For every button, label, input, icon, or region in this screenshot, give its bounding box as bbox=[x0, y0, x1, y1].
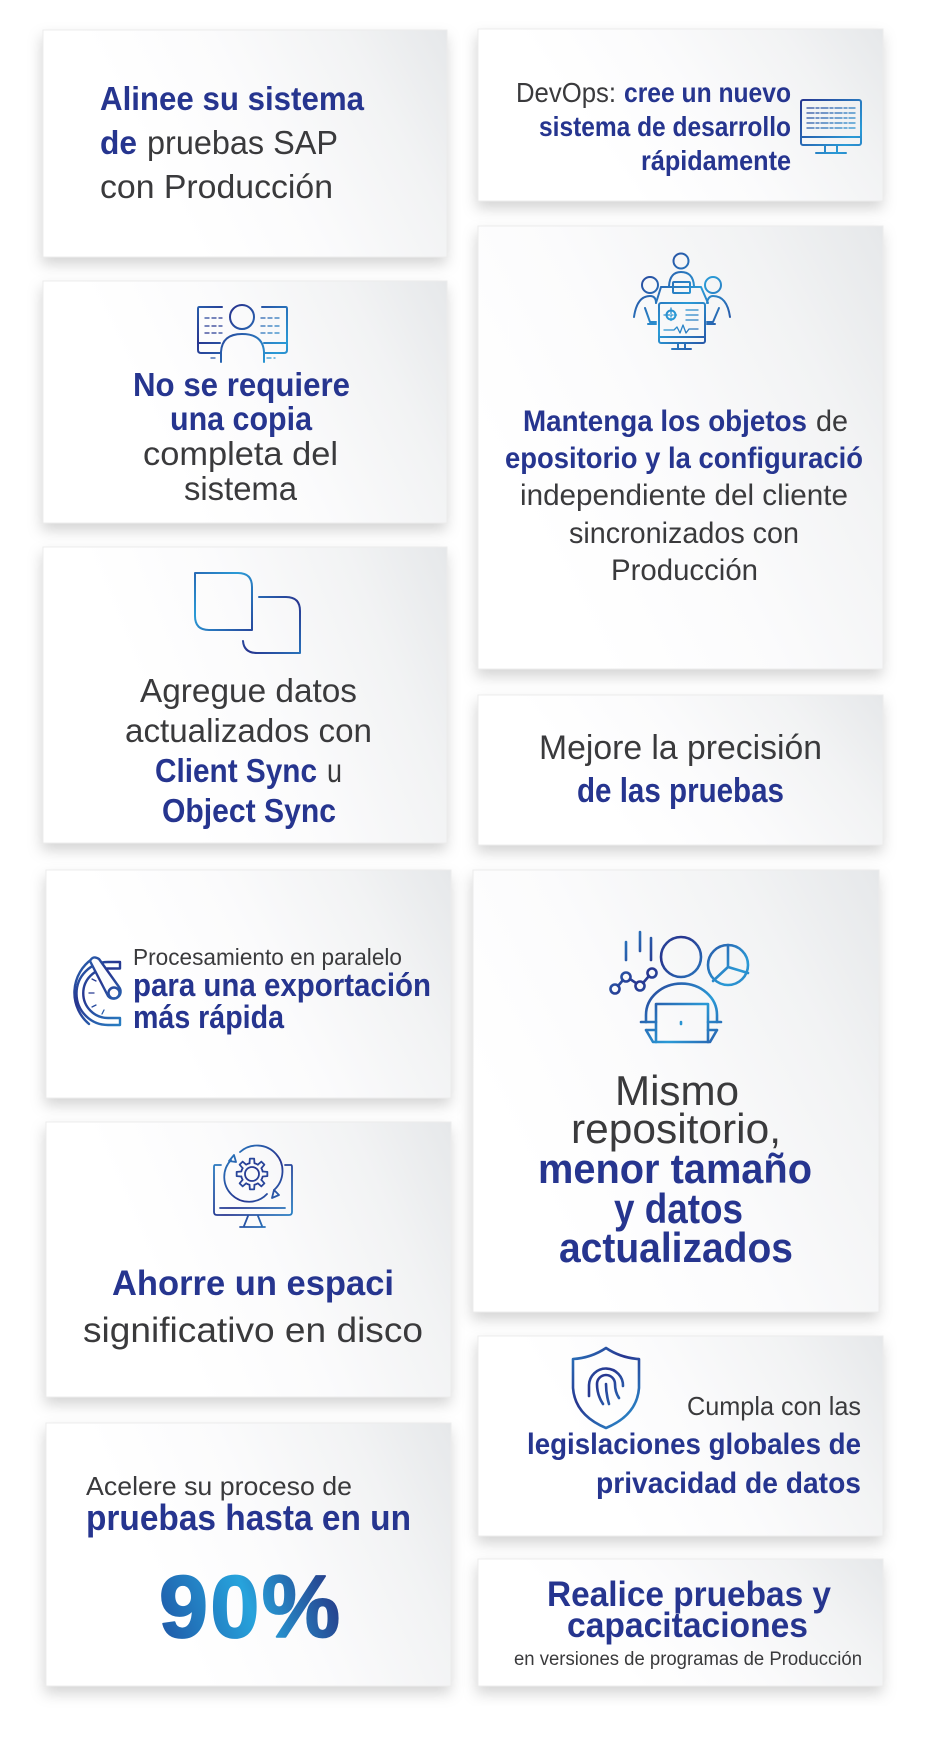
heading: privacy compliance: Cumpla con las bbox=[687, 1391, 861, 1421]
panel: accelerate testing 90% bbox=[46, 1423, 451, 1686]
heading: align test system: pruebas SAP bbox=[147, 124, 338, 161]
heading: no full copy required: una copia bbox=[170, 400, 313, 437]
heading: client sync: Object Sync bbox=[162, 792, 336, 829]
icon: team around monitor bbox=[634, 254, 730, 349]
panel: parallel processing bbox=[46, 870, 451, 1098]
heading: keep repository objects in sync: independiente del cliente bbox=[520, 479, 848, 512]
panel: save disk space bbox=[46, 1122, 451, 1397]
heading: same repository: y datos bbox=[614, 1185, 743, 1232]
heading: same repository: repositorio, bbox=[571, 1105, 781, 1152]
heading: same repository: actualizados bbox=[559, 1224, 793, 1271]
panel: client sync bbox=[43, 547, 447, 843]
icon: person before screens bbox=[198, 305, 287, 362]
heading: keep repository objects in sync: Producción bbox=[611, 554, 758, 587]
heading: no full copy required: No se requiere bbox=[133, 366, 350, 403]
heading: testing and training: Realice pruebas y bbox=[547, 1575, 832, 1614]
heading: save disk space bbox=[83, 1264, 423, 1350]
big number: 90%: 90% bbox=[159, 1557, 340, 1656]
heading: accelerate testing: Acelere su proceso de bbox=[86, 1471, 352, 1501]
heading: parallel processing: Procesamiento en paralelo bbox=[133, 944, 402, 970]
panel: devops bbox=[478, 29, 883, 201]
heading: keep repository objects in sync: Mantenga los objetos bbox=[523, 405, 807, 438]
heading: client sync: Agregue datos bbox=[140, 672, 357, 709]
heading: same repository: menor tamaño bbox=[538, 1145, 812, 1192]
heading: testing and training: en versiones de programas de Producción bbox=[514, 1649, 862, 1670]
heading: client sync: actualizados con bbox=[125, 712, 372, 749]
heading: parallel processing bbox=[133, 944, 431, 1035]
heading: devops bbox=[516, 77, 791, 176]
heading: save disk space: significativo en disco bbox=[83, 1311, 423, 1350]
panel: privacy compliance bbox=[478, 1336, 883, 1536]
heading: keep repository objects in sync: sincronizados con bbox=[569, 517, 799, 550]
heading: privacy compliance: legislaciones globales de bbox=[527, 1428, 861, 1461]
icon: fingerprint shield bbox=[573, 1348, 639, 1428]
panel: improve accuracy bbox=[478, 695, 883, 845]
heading: improve accuracy: de las pruebas bbox=[577, 772, 784, 810]
heading: parallel processing: para una exportación bbox=[133, 967, 431, 1003]
heading: align test system: de bbox=[100, 124, 137, 161]
icon: two rounded squares bbox=[195, 573, 300, 653]
panel: same repository bbox=[473, 870, 879, 1312]
icon: monitor with gear bbox=[214, 1146, 292, 1227]
panel: no full copy required bbox=[43, 281, 447, 523]
heading: devops: rápidamente bbox=[641, 145, 791, 176]
heading: keep repository objects in sync: de bbox=[816, 405, 848, 438]
heading: testing and training bbox=[514, 1575, 862, 1670]
heading: devops: DevOps: bbox=[516, 77, 616, 108]
heading: devops: cree un nuevo bbox=[624, 77, 791, 108]
heading: align test system bbox=[100, 80, 365, 205]
panel: keep repository objects in sync bbox=[478, 226, 883, 669]
heading: testing and training: capacitaciones bbox=[567, 1606, 808, 1645]
icon: speed gauge bbox=[74, 957, 121, 1025]
heading: accelerate testing: pruebas hasta en un bbox=[86, 1497, 411, 1538]
heading: improve accuracy: Mejore la precisión bbox=[539, 729, 822, 767]
heading: no full copy required: completa del bbox=[143, 435, 338, 472]
heading: no full copy required: sistema bbox=[184, 470, 298, 507]
heading: same repository: Mismo bbox=[615, 1067, 739, 1114]
heading: save disk space: Ahorre un espaci bbox=[112, 1264, 394, 1303]
panel: testing and training bbox=[478, 1559, 883, 1686]
heading: parallel processing: más rápida bbox=[133, 999, 284, 1035]
heading: improve accuracy bbox=[539, 729, 822, 810]
icon: code monitor bbox=[801, 100, 861, 153]
heading: same repository bbox=[538, 1067, 812, 1271]
heading: align test system: Alinee su sistema bbox=[100, 80, 365, 117]
heading: keep repository objects in sync bbox=[505, 405, 863, 587]
heading: align test system: con Producción bbox=[100, 168, 333, 205]
heading: privacy compliance: privacidad de datos bbox=[596, 1467, 861, 1500]
heading: accelerate testing bbox=[86, 1471, 411, 1538]
heading: privacy compliance bbox=[527, 1391, 861, 1500]
heading: no full copy required bbox=[133, 366, 350, 507]
icon: person with charts and laptop bbox=[610, 932, 748, 1042]
heading: client sync: u bbox=[327, 752, 342, 789]
heading: devops: sistema de desarrollo bbox=[539, 111, 791, 142]
panel: align test system bbox=[43, 30, 447, 257]
heading: client sync bbox=[125, 672, 372, 829]
heading: client sync: Client Sync bbox=[155, 752, 317, 789]
heading: keep repository objects in sync: epositorio y la configuració bbox=[505, 442, 863, 475]
